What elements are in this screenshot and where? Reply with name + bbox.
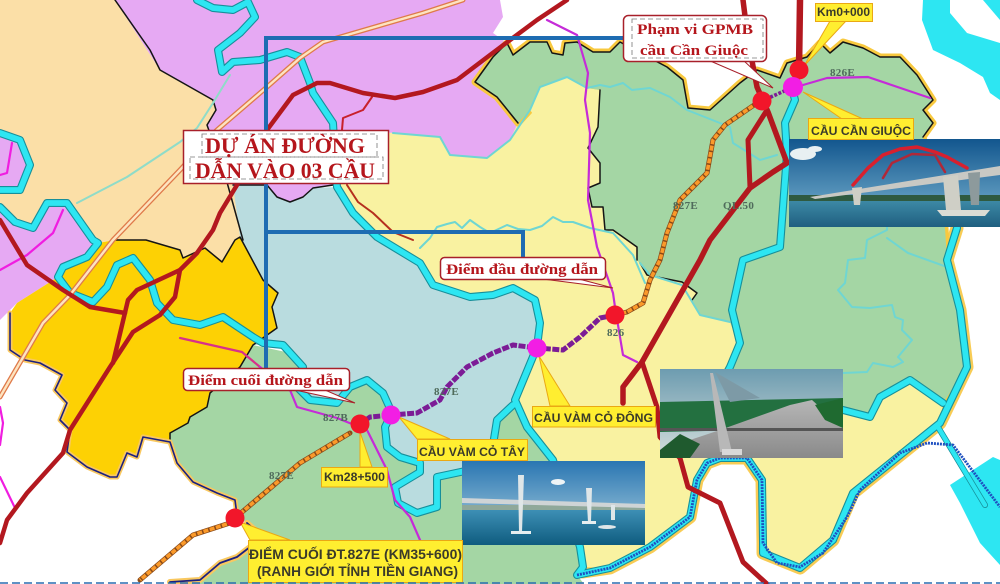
label: Km0+000: Km0+000 bbox=[817, 5, 870, 19]
province border navy bbox=[10, 313, 263, 582]
region: yellow district bbox=[337, 77, 943, 568]
region borders bbox=[115, 0, 933, 442]
road numbers: 827B bbox=[323, 412, 348, 424]
callout: pham vi GPMB bbox=[624, 16, 773, 88]
road numbers: QL.50 bbox=[723, 200, 754, 212]
label: Km28+500 bbox=[322, 468, 388, 487]
callout: diem dau duong dan bbox=[440, 258, 613, 288]
road numbers: 826 bbox=[607, 327, 625, 339]
pale canals bbox=[77, 75, 947, 373]
region: orange district bbox=[10, 237, 278, 477]
region: peach district bbox=[0, 0, 243, 262]
road nodes red bbox=[226, 60, 808, 528]
road numbers: 827E bbox=[434, 386, 459, 398]
road numbers bbox=[269, 67, 855, 482]
title callout: DẪN VÀO 03 CẦU bbox=[195, 158, 375, 183]
province glow along river edge bbox=[583, 228, 967, 572]
bottom dashed border bbox=[0, 582, 1000, 584]
thin red roads bbox=[342, 97, 413, 240]
big river top right bbox=[922, 0, 1000, 565]
callout: diem cuoi duong dan: Điểm cuối đường dẫn bbox=[188, 373, 344, 389]
title callout: DỰ ÁN ĐƯỜNG bbox=[205, 133, 365, 158]
title callout bbox=[184, 130, 388, 184]
region: lilac pockets west bbox=[0, 133, 98, 320]
label: cau Can Giuoc: CẦU CẦN GIUỘC bbox=[811, 123, 911, 138]
label: cau Vam Co Dong: CẦU VÀM CỎ ĐÔNG bbox=[534, 410, 653, 425]
label: cau Vam Co Dong bbox=[532, 406, 656, 427]
road numbers: 827E bbox=[673, 200, 698, 212]
callout: diem cuoi duong dan bbox=[184, 368, 355, 403]
orange dashed roads bbox=[140, 103, 757, 580]
label: diem cuoi DT.827E: ĐIỂM CUỐI ĐT.827E (KM35+600) bbox=[249, 547, 462, 562]
region: lilac district north bbox=[115, 0, 518, 202]
region: green northeast bbox=[475, 42, 967, 430]
dashed boundary on lower river bbox=[577, 443, 1000, 575]
label: cau Can Giuoc bbox=[808, 118, 914, 140]
label: Km28+500: Km28+500 bbox=[324, 470, 385, 484]
callout: diem dau duong dan: Điểm đầu đường dẫn bbox=[446, 262, 599, 278]
national highways red bbox=[0, 0, 800, 584]
callout: pham vi GPMB: cầu Cần Giuộc bbox=[640, 43, 748, 59]
label: cau Vam Co Tay bbox=[418, 440, 528, 460]
callout: pham vi GPMB: Phạm vi GPMB bbox=[637, 22, 753, 38]
blue project frame lines bbox=[266, 38, 625, 368]
purple dashed approach road bbox=[360, 87, 793, 424]
region: blue-grey district bbox=[233, 185, 540, 513]
bridge nodes magenta bbox=[382, 77, 803, 424]
photo: cau Can Giuoc bbox=[789, 139, 1000, 227]
photo: cau Vam Co Dong bbox=[660, 369, 843, 458]
road numbers: 826E bbox=[830, 67, 855, 79]
photo: cau Vam Co Tay bbox=[462, 461, 645, 545]
callout pointers yellow bbox=[240, 21, 863, 540]
expressway double line bbox=[0, 0, 463, 397]
region: green southwest bbox=[170, 345, 584, 584]
label: diem cuoi DT.827E: (RANH GIỚI TỈNH TIỀN GIANG) bbox=[257, 564, 458, 579]
label: diem cuoi DT.827E bbox=[248, 540, 462, 582]
label: cau Vam Co Tay: CẦU VÀM CỎ TÂY bbox=[419, 444, 525, 459]
road numbers: 827E bbox=[269, 470, 294, 482]
